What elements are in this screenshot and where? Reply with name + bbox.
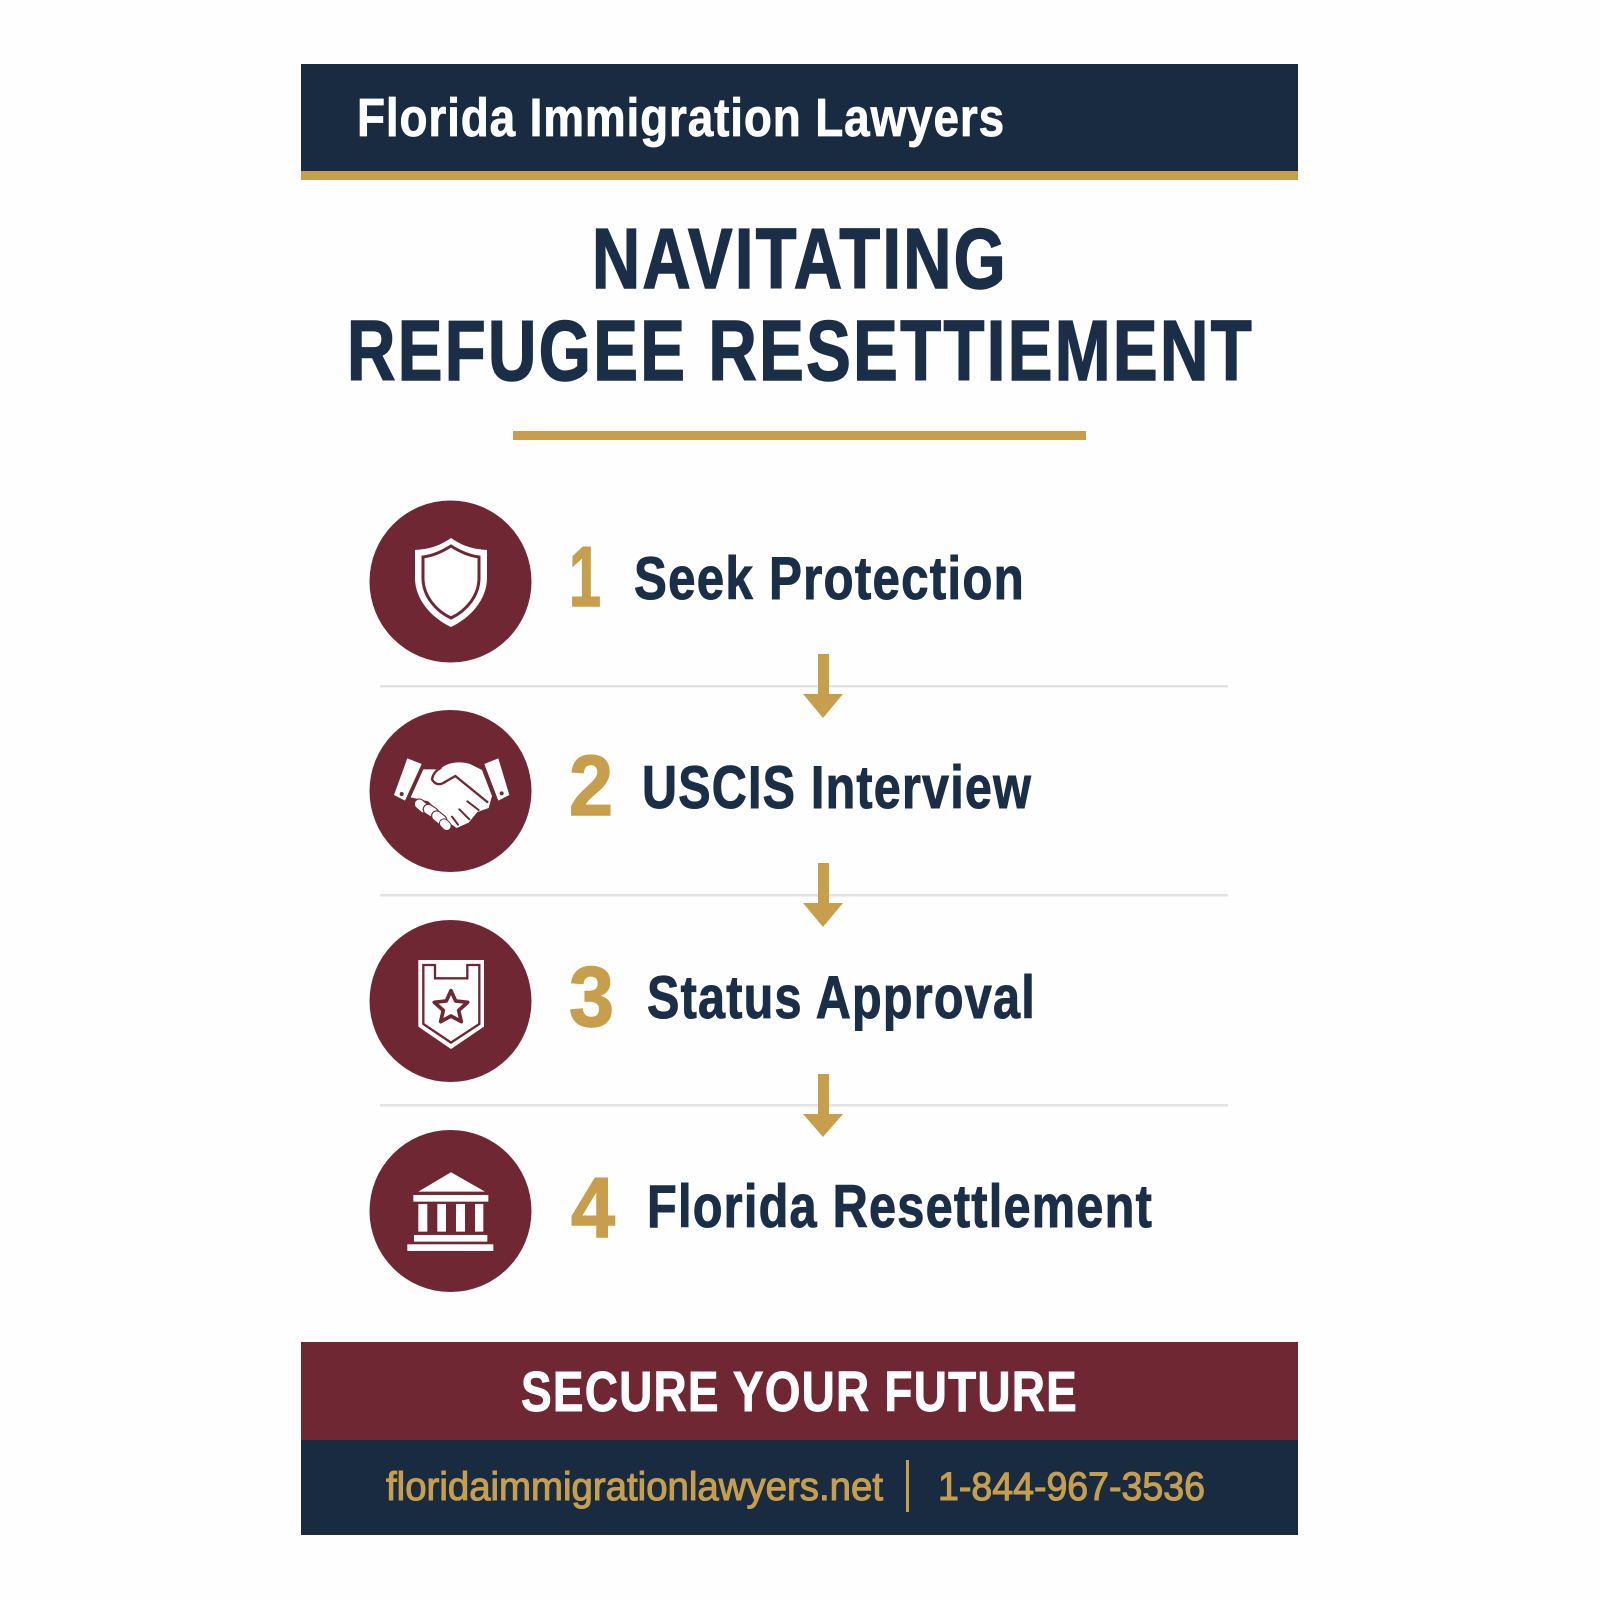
arrow 2 [803,863,843,927]
step 3: status approval [370,920,1036,1082]
separator [906,1460,909,1512]
number 3: 3 [569,950,614,1045]
contact band [301,1440,1298,1535]
step 1: seek protection [370,500,1025,662]
step 2: uscis interview [370,710,1032,872]
arrow 3 [803,1074,843,1137]
call to action text: SECURE YOUR FUTURE [521,1360,1078,1424]
title: REFUGEE RESETTIEMENT [347,304,1254,399]
number 2: 2 [569,739,613,834]
step 4: florida resettlement [370,1130,1153,1292]
header band [301,64,1298,180]
icon: shield [370,500,532,662]
label: uscis interview: USCIS Interview [642,754,1032,821]
icon: handshake [370,710,532,872]
call to action band [301,1342,1298,1440]
number 4: 4 [571,1161,615,1256]
arrow 1 [803,654,843,718]
phone number: 1-844-967-3536 [938,1465,1205,1509]
header firm name: Florida Immigration Lawyers [357,88,1005,148]
label: seek protection: Seek Protection [634,545,1025,612]
label: status approval: Status Approval [647,964,1036,1031]
label: florida resettlement: Florida Resettlement [647,1173,1153,1240]
website: floridaimmigrationlawyers.net [386,1465,883,1509]
title [347,212,1254,399]
title underline [513,431,1086,440]
icon: courthouse [370,1130,532,1292]
icon: badge with star [370,920,532,1082]
title: NAVITATING [592,212,1008,307]
number 1: 1 [569,530,601,625]
